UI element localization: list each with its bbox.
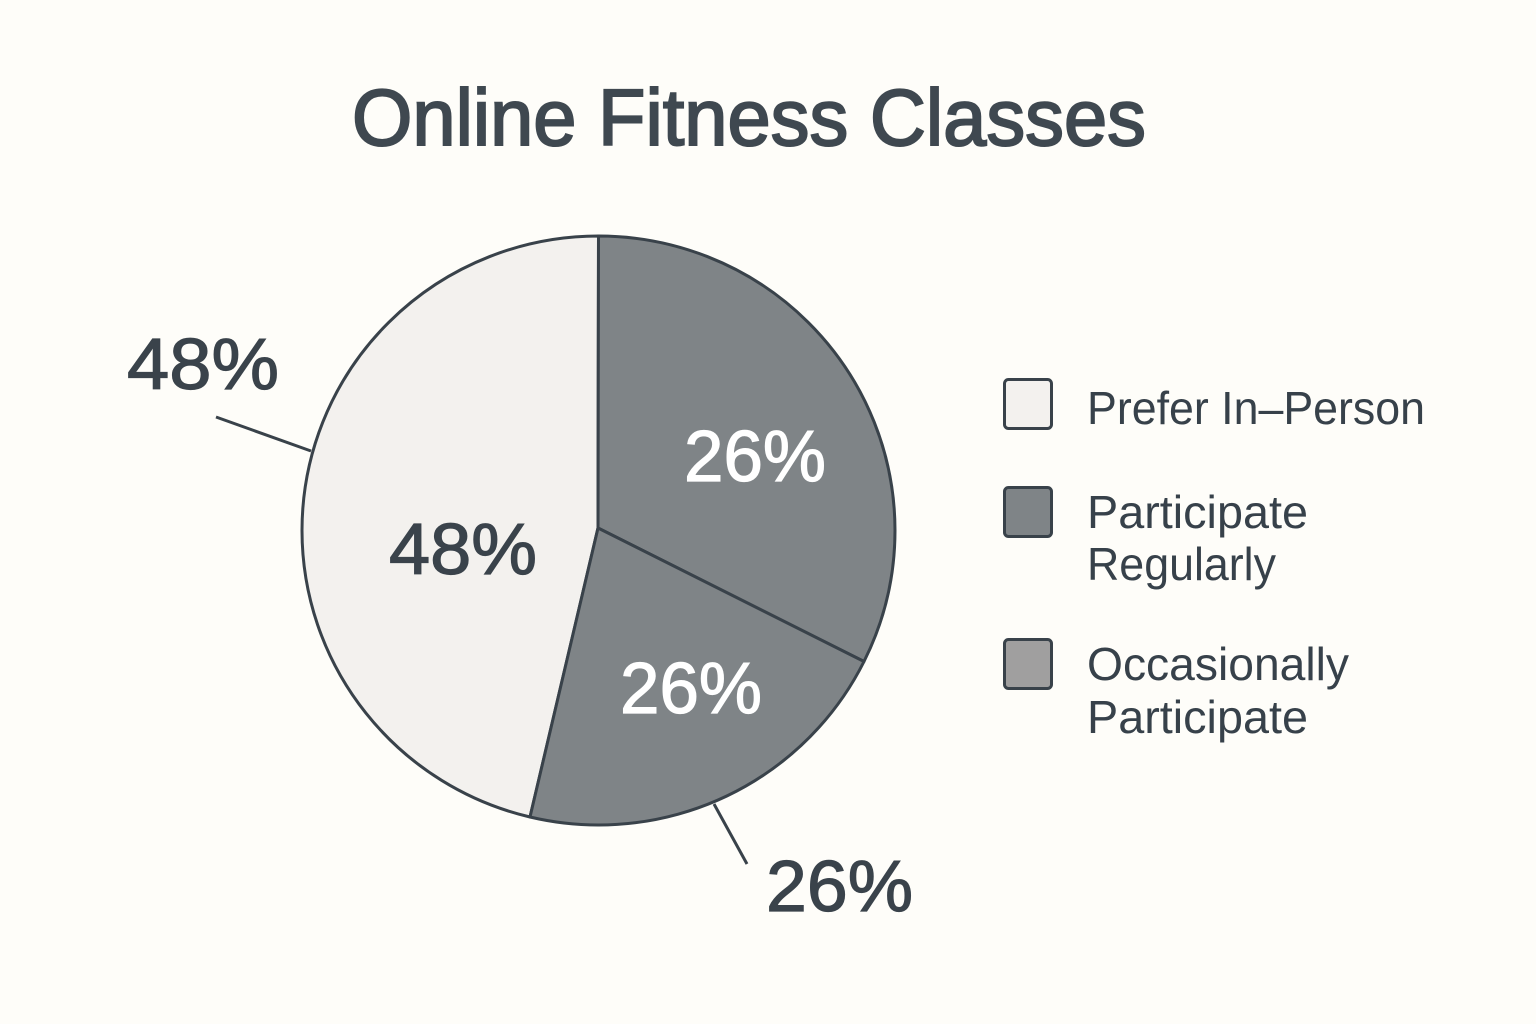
legend item: prefer in-person: Prefer In–Person: [1087, 382, 1425, 434]
slice label: 26% lower: 26%: [620, 649, 762, 729]
legend item: occasionally participate: [1004, 638, 1349, 743]
title: Online Fitness Classes: [352, 73, 1146, 162]
callout: 48% outside: [127, 325, 311, 451]
slice: prefer in-person 48%: [302, 236, 598, 817]
legend: [1004, 380, 1425, 743]
callout: 26% outside: [714, 804, 913, 927]
callout: 48% outside: 48%: [127, 325, 279, 405]
slice: occasionally participate 26%: [530, 528, 864, 825]
legend item: occasionally participate: Occasionally: [1087, 638, 1349, 690]
legend item: occasionally participate: Participate: [1087, 691, 1308, 743]
slice: participate regularly 26%: [598, 236, 895, 662]
callout: 26% outside: 26%: [766, 847, 913, 927]
slice label: 26% upper right: 26%: [684, 417, 826, 497]
slice label: 48% inside: 48%: [389, 510, 537, 590]
legend item: participate regularly: Participate: [1087, 486, 1308, 538]
legend item: participate regularly: Regularly: [1087, 538, 1276, 590]
legend item: participate regularly: [1004, 486, 1308, 590]
pie chart: [302, 236, 895, 825]
